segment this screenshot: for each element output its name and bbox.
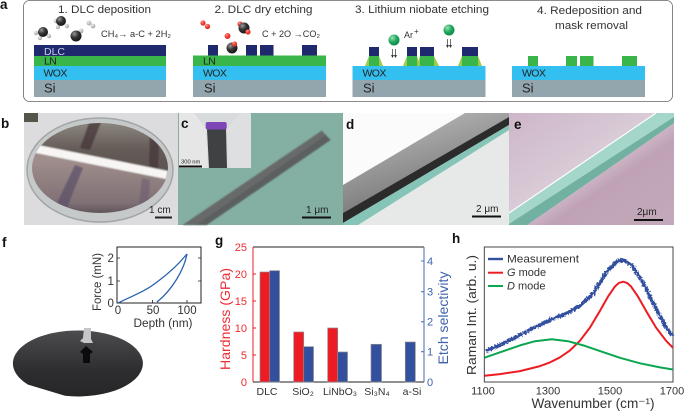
layer names: WOX — [522, 68, 546, 80]
layer names: Si — [204, 80, 216, 96]
reaction equation 2: C + 2O →CO₂ — [262, 29, 321, 39]
selectivity tick labels — [427, 256, 433, 389]
DLC masks — [369, 47, 478, 56]
heading step 4: mask removal — [555, 20, 628, 32]
Si layer — [352, 80, 486, 97]
hardness tick labels: 10 — [235, 323, 247, 335]
blue selectivity bars — [270, 271, 415, 382]
reaction equation 1: CH₄→ a-C + 2H₂ — [101, 29, 172, 39]
scale bar — [155, 216, 172, 218]
step 3: lithium niobate etching — [352, 4, 489, 97]
panel b: wafer photo — [24, 113, 178, 225]
material labels: DLC — [256, 386, 278, 398]
LN waveguides — [528, 56, 637, 66]
heading step 1: 1. DLC deposition — [58, 4, 151, 16]
x tick labels: 1300 — [536, 386, 560, 398]
material labels: Si₃N₄ — [364, 386, 390, 398]
layer names: DLC — [44, 46, 65, 58]
selectivity tick labels: 1 — [427, 346, 433, 358]
wafer disc — [32, 123, 168, 213]
LN layer — [34, 56, 166, 66]
label c: c — [181, 116, 189, 131]
selectivity tick labels: 2 — [427, 316, 433, 328]
DLC layer — [34, 45, 166, 56]
layer names: LN — [203, 56, 215, 68]
x tick labels: 1100 — [471, 386, 495, 398]
Si layer — [34, 80, 166, 97]
hardness tick labels — [235, 242, 247, 389]
G mode curve — [484, 282, 673, 376]
force-depth chart — [92, 247, 201, 330]
DLC masks — [208, 45, 317, 56]
load-unload curve — [118, 254, 187, 303]
material labels: SiO₂ — [292, 386, 314, 398]
measurement curve — [486, 260, 672, 351]
heading step 3: 3. Lithium niobate etching — [355, 4, 489, 16]
scale text: 2μm — [637, 207, 657, 218]
red hardness bars — [260, 272, 338, 382]
layer names: WOX — [44, 68, 67, 80]
icon: oxygen and CO2 molecules — [200, 20, 251, 53]
hardness axis — [253, 247, 256, 382]
layer names — [362, 68, 386, 96]
legend: D mode — [507, 280, 546, 292]
y axis tick labels: 2 — [108, 253, 114, 265]
icon: diamond-like carbon disk with pillar — [13, 328, 143, 396]
Raman spectrum chart — [464, 247, 684, 411]
layer names: WOX — [203, 68, 227, 80]
waveguide beam — [183, 131, 331, 225]
y axis tick labels — [108, 253, 114, 310]
selectivity axis — [421, 247, 424, 382]
icon: argon ions with arrows — [388, 24, 454, 58]
Si layer — [193, 80, 326, 97]
top and bottom axes — [253, 247, 424, 382]
heading step 4: 4. Redeposition and — [537, 5, 642, 17]
label h: h — [452, 231, 460, 246]
hardness tick labels: 0 — [241, 377, 247, 389]
label e: e — [514, 117, 522, 132]
x axis tick labels — [115, 305, 197, 317]
etched LN ridges — [369, 56, 478, 66]
pillar reflection — [80, 346, 93, 363]
WOX layer — [193, 66, 326, 80]
hardness axis title: Hardness (GPa) — [218, 268, 233, 370]
pillar — [80, 328, 93, 343]
step 2: DLC dry etching — [193, 4, 326, 97]
LN layer — [193, 56, 326, 66]
layer names: LN — [44, 56, 56, 68]
y axis title: Raman Int. (arb. u.) — [464, 255, 479, 375]
hardness tick labels: 20 — [235, 269, 247, 281]
material labels — [256, 386, 421, 398]
layer names: WOX — [362, 68, 386, 80]
scale text: 1 cm — [149, 205, 171, 216]
x axis tick labels: 0 — [115, 305, 121, 317]
layer names — [522, 68, 546, 96]
inset cross-section: 300 nm — [181, 160, 201, 166]
scale bar — [634, 219, 663, 221]
x axis title: Depth (nm) — [134, 318, 193, 330]
scale bar — [472, 216, 501, 218]
selectivity tick labels: 4 — [427, 256, 433, 268]
material labels: a-Si — [403, 386, 421, 398]
selectivity axis title: Etch selectivity — [436, 271, 451, 364]
x axis tick labels: 50 — [147, 305, 159, 317]
step 1: DLC deposition — [34, 4, 172, 97]
hardness tick labels: 15 — [235, 296, 247, 308]
panel d: SEM with mask — [343, 113, 509, 225]
layer names: Si — [44, 80, 56, 96]
D mode curve — [484, 339, 673, 370]
y axis tick labels: 0 — [108, 298, 114, 310]
icon: argon ions with arrows: + — [414, 27, 419, 36]
label d: d — [346, 117, 354, 132]
icon: methane and hydrogen molecules — [34, 16, 95, 42]
layer names — [203, 56, 227, 96]
hardness tick labels: 25 — [235, 242, 247, 254]
x tick labels — [471, 386, 684, 398]
selectivity tick labels: 0 — [427, 377, 433, 389]
scale bar — [302, 216, 331, 218]
icon: argon ions with arrows: Ar — [404, 30, 413, 40]
y axis title: Force (mN) — [92, 253, 104, 311]
layer names: Si — [522, 80, 534, 96]
heading step 2: 2. DLC dry etching — [214, 4, 312, 16]
y axis tick labels: 1 — [108, 276, 114, 288]
WOX layer — [352, 66, 486, 80]
bar chart: hardness and etch selectivity — [218, 242, 451, 398]
scale text: 2 μm — [476, 204, 498, 215]
panel a: fabrication process frame — [24, 0, 672, 102]
x tick labels: 1700 — [660, 386, 684, 398]
label b: b — [1, 116, 9, 131]
x axis tick labels: 100 — [177, 305, 197, 317]
panel e: SEM after etching — [509, 113, 674, 225]
legend: Measurement — [507, 254, 579, 266]
heading step 4 — [537, 5, 642, 32]
WOX layer — [34, 66, 166, 80]
scale text: 1 μm — [306, 205, 328, 216]
x tick labels: 1500 — [598, 386, 622, 398]
selectivity tick labels: 3 — [427, 286, 433, 298]
label g: g — [215, 233, 223, 248]
WOX layer — [512, 66, 645, 80]
legend: G mode — [507, 267, 546, 279]
step 4: redeposition and mask removal — [512, 5, 645, 97]
redeposited side walls — [365, 56, 482, 66]
legend — [488, 254, 579, 292]
Si layer — [512, 80, 645, 97]
layer names: Si — [363, 80, 375, 96]
hardness tick labels: 5 — [241, 350, 247, 362]
layer names — [44, 46, 67, 96]
inset cross-section — [179, 113, 251, 168]
material labels: LiNbO₃ — [323, 386, 357, 398]
label f: f — [2, 235, 7, 250]
panel c: waveguide SEM — [178, 113, 343, 225]
x axis title: Wavenumber (cm⁻¹) — [532, 396, 654, 411]
